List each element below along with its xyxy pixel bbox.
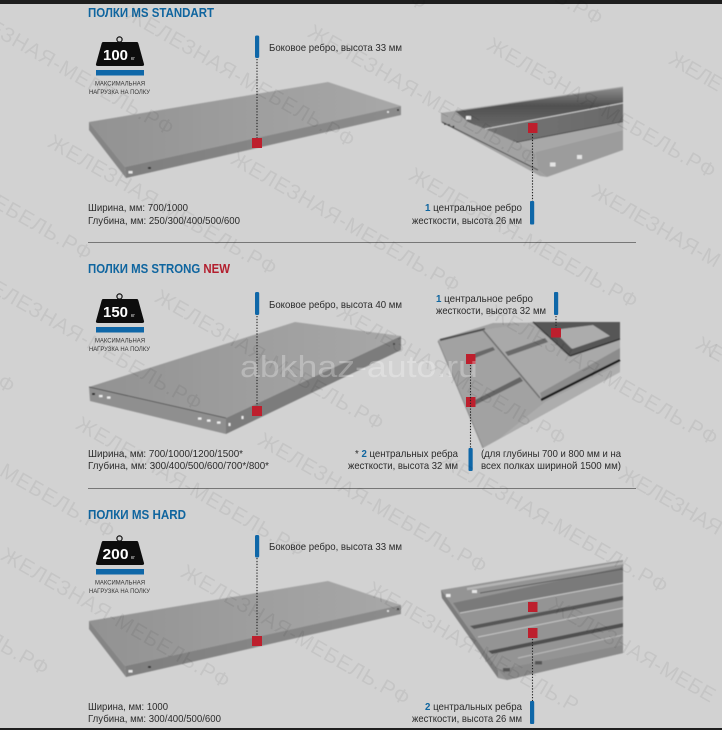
diagonal watermarks: ЖЕЛЕЗНАЯ-МЕБЕЛЬ.РФ: [227, 147, 464, 297]
callout: central ribs, two: жесткости, высота 32 мм: [348, 460, 458, 472]
icon: weight 100 kg: НАГРУЗКА НА ПОЛКУ: [89, 90, 150, 96]
dimensions text: [88, 202, 240, 227]
icon: weight 150 kg: [89, 294, 150, 353]
dimensions text: Глубина, мм: 250/300/400/500/600: [88, 215, 240, 227]
diagonal watermarks: ЖЕЛЕЗНАЯ-МЕБЕЛЬ.РФ: [177, 560, 414, 710]
callout: central rib, one: 1 центральное ребро: [436, 293, 533, 305]
icon: weight 200 kg: кг: [131, 555, 135, 561]
dimensions text: Ширина, мм: 700/1000/1200/1500*: [88, 448, 243, 460]
center site watermark: abkhaz-auto.ru: [240, 349, 478, 384]
heading: MS Strong New: ПОЛКИ MS STRONG NEW: [88, 261, 231, 276]
callout: central ribs height: 2 центральных ребра: [425, 701, 522, 713]
callout: side rib height: Боковое ребро, высота 33 мм: [269, 42, 402, 54]
diagonal watermarks: ЖЕЛЕЗНАЯ-МЕБЕЛЬ.РФ: [304, 20, 541, 170]
shelf illustration: full view: [89, 581, 401, 677]
callout: central rib height: жесткости, высота 26 мм: [412, 215, 522, 227]
diagonal watermarks: ЖЕЛЕЗНАЯ-МЕБЕЛЬ.РФ: [405, 163, 642, 313]
callout: central rib height: [412, 123, 538, 227]
callout: side rib height: [252, 535, 402, 646]
callout: central ribs, two: [348, 354, 621, 472]
shelf illustration: underside frame: [438, 322, 620, 448]
divider: [88, 488, 636, 490]
icon: weight 150 kg: 150: [103, 304, 128, 321]
diagonal watermarks: ЖЕЛЕЗНАЯ-МЕБЕЛЬ.РФ: [333, 300, 570, 450]
diagonal watermarks: ЖЕЛЕЗНАЯ-МЕБЕЛЬ.Р: [363, 577, 582, 717]
diagonal watermarks: ЖЕЛЕЗНАЯ-МЕБЕЛЬ.РФ: [435, 448, 672, 598]
callout: side rib height: [252, 292, 402, 416]
panel: MS Strong: [88, 261, 621, 472]
icon: weight 150 kg: НАГРУЗКА НА ПОЛКУ: [89, 347, 150, 353]
heading: MS Standart: ПОЛКИ MS STANDART: [88, 5, 214, 20]
diagonal watermarks: ЖЕЛЕЗНАЯ-МЕБЕЛЬ.РФ: [483, 33, 720, 183]
diagonal watermarks: ЖЕЛЕЗНАЯ-МЕБЕЛЬ.РФ: [485, 300, 722, 450]
heading: MS Hard: ПОЛКИ MS HARD: [88, 507, 186, 522]
diagonal watermarks: ЖЕЛЕЗНАЯ-МЕБЕЛЬ.РФ: [151, 285, 388, 435]
dimensions text: Глубина, мм: 300/400/500/600: [88, 713, 221, 725]
panel: MS Standart: [88, 5, 623, 227]
callout: central ribs, two: всех полках шириной 1500 мм): [481, 460, 621, 472]
diagonal watermarks: ЖЕЛЕЗНАЯ-МЕБЕЛЬ.РФ: [72, 412, 309, 562]
icon: weight 100 kg: [89, 37, 150, 96]
shelf illustration: full view: [89, 82, 401, 178]
dimensions text: Глубина, мм: 300/400/500/600/700*/800*: [88, 460, 269, 472]
icon: weight 100 kg: МАКСИМАЛЬНАЯ: [95, 82, 145, 88]
icon: weight 200 kg: [89, 536, 150, 595]
diagonal watermarks: ЖЕЛЕЗНАЯ-МЕБЕ: [545, 593, 719, 707]
diagonal watermarks: ЖЕЛЕЗНАЯ-М: [588, 180, 722, 272]
diagonal watermarks: ЖЕЛЕЗНАЯ-МЕБЕЛЬ.РФ: [254, 428, 491, 578]
callout: side rib height: [252, 36, 402, 148]
top dark bar: [0, 0, 722, 4]
icon: weight 150 kg: кг: [131, 313, 135, 319]
dimensions text: [88, 448, 269, 472]
bottom dark bar: [0, 728, 722, 730]
dimensions text: Ширина, мм: 1000: [88, 701, 168, 713]
diagonal watermarks: ЖЕЛЕЗНАЯ-МЕБЕЛЬ.РФ: [122, 2, 359, 152]
divider: [88, 242, 636, 244]
callout: central ribs, two: (для глубины 700 и 800 мм и на: [481, 448, 621, 460]
shelf illustration: rib close-up: [441, 87, 623, 177]
callout: central rib height: 1 центральное ребро: [425, 202, 522, 214]
diagonal watermarks: ЖЕЛЕЗНАЯ-МЕБЕЛЬ.РФ: [0, 543, 234, 693]
dimensions text: Ширина, мм: 700/1000: [88, 202, 188, 214]
callout: central rib, one: [436, 292, 561, 338]
callout: side rib height: Боковое ребро, высота 33 мм: [269, 541, 402, 553]
shelf illustration: full view: [89, 322, 401, 434]
panel: MS Hard: [88, 507, 623, 725]
dimensions text: [88, 701, 221, 725]
icon: weight 200 kg: МАКСИМАЛЬНАЯ: [95, 580, 145, 586]
callout: central rib, one: жесткости, высота 32 мм: [436, 305, 546, 317]
icon: weight 200 kg: НАГРУЗКА НА ПОЛКУ: [89, 589, 150, 595]
callout: central ribs height: жесткости, высота 26 мм: [412, 713, 522, 725]
callout: side rib height: Боковое ребро, высота 40 мм: [269, 299, 402, 311]
diagonal watermarks: ЖЕЛЕЗНАЯ-МЕБЕЛЬ.РФ: [44, 130, 281, 280]
callout: central ribs height: [412, 602, 538, 725]
callout: central ribs, two: * 2 центральных ребра: [355, 448, 458, 460]
shelf illustration: two-rib close-up: [441, 560, 623, 680]
icon: weight 200 kg: 200: [102, 546, 128, 563]
icon: weight 100 kg: 100: [103, 47, 128, 64]
icon: weight 100 kg: кг: [131, 56, 135, 62]
icon: weight 150 kg: МАКСИМАЛЬНАЯ: [95, 338, 145, 344]
